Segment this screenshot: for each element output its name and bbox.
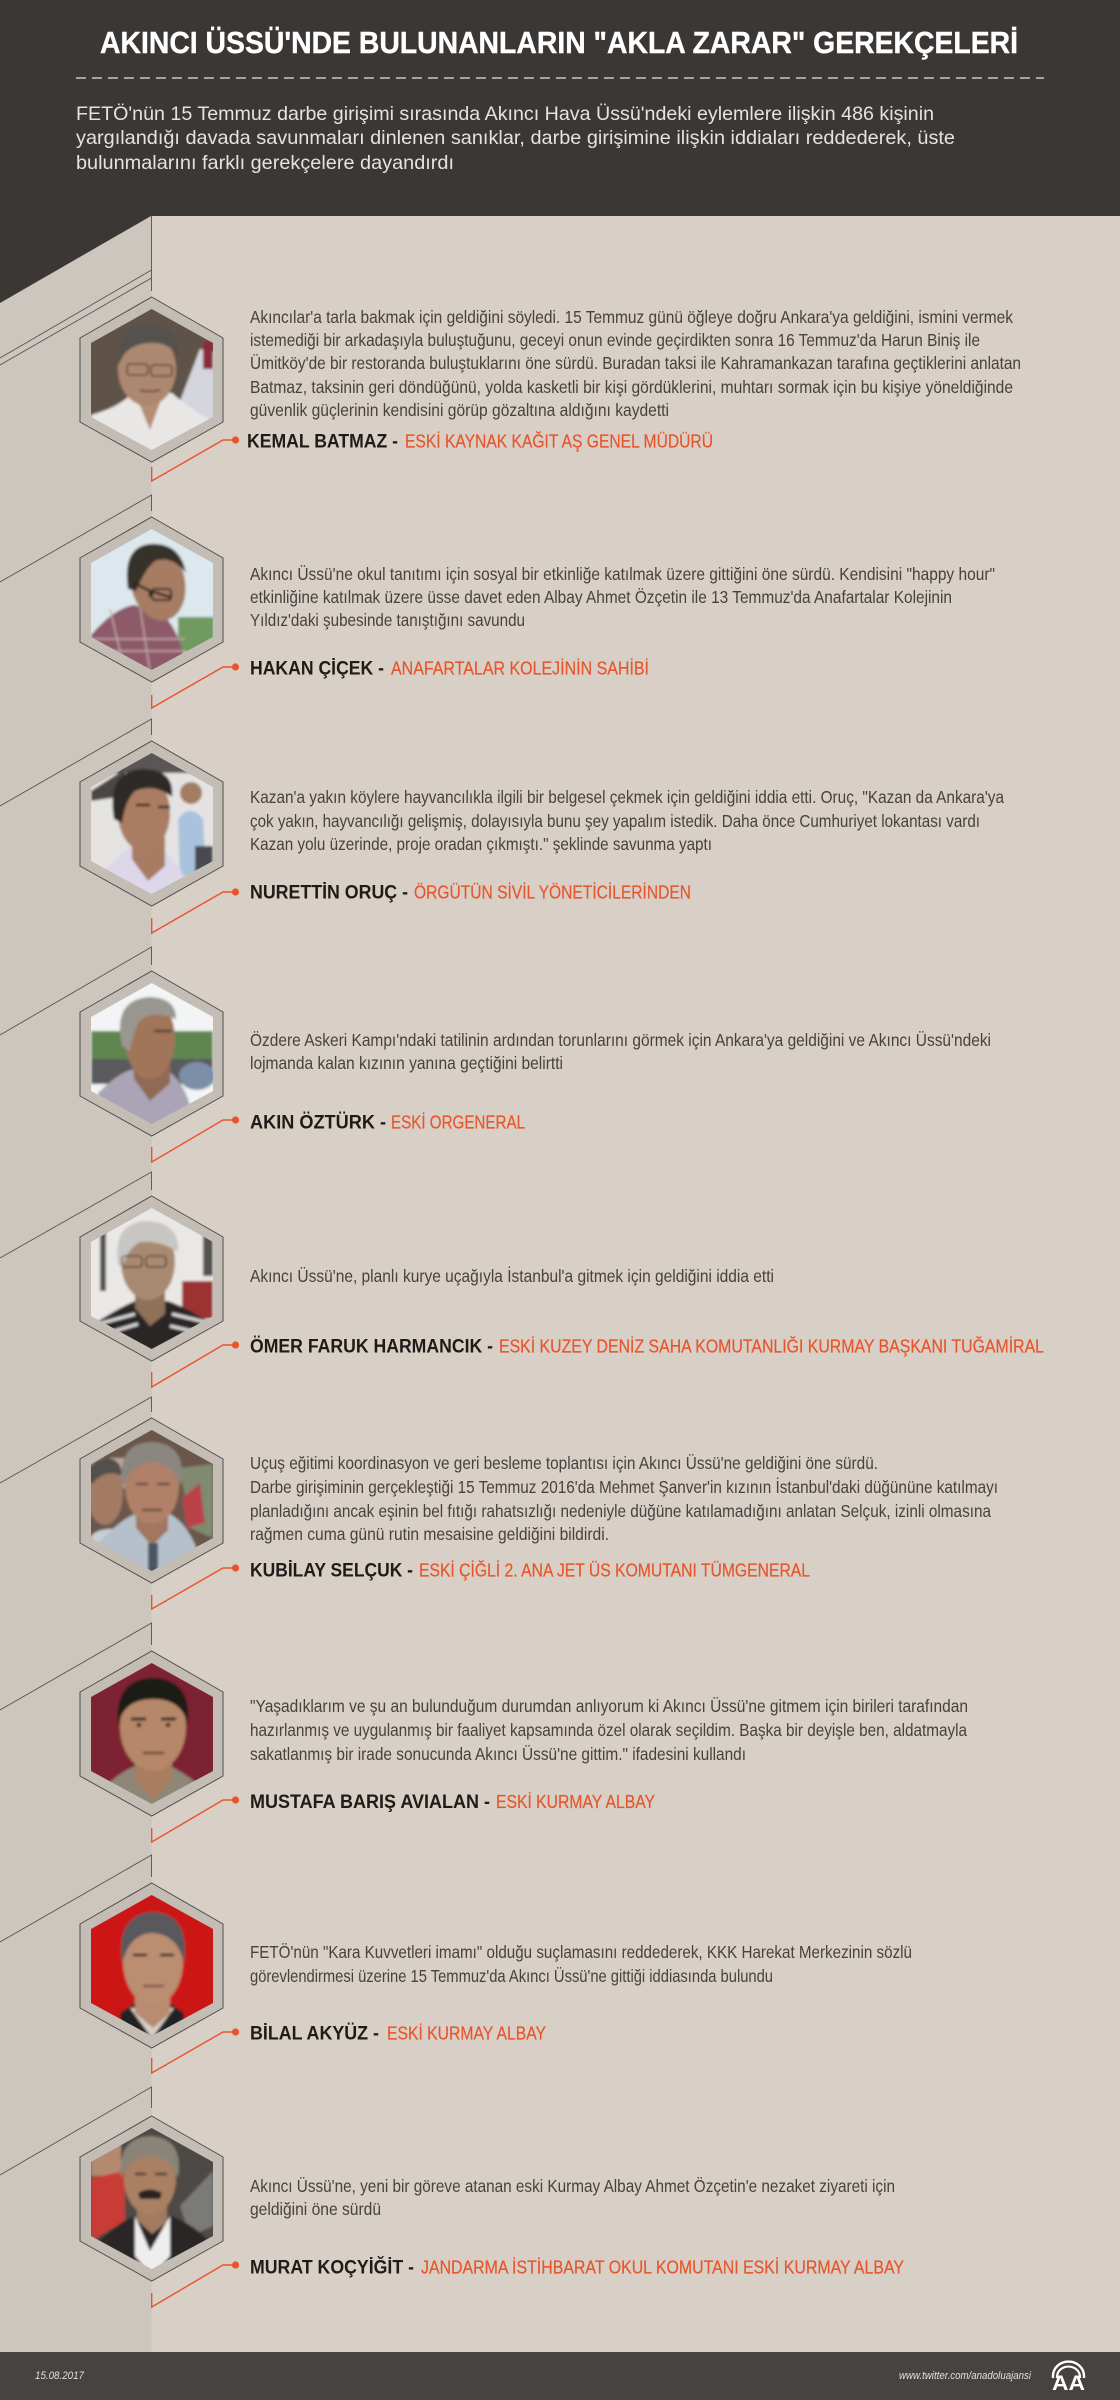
description <box>250 307 1021 420</box>
portrait: Kubilay Selçuk <box>80 1418 223 1583</box>
connector <box>152 1341 239 1387</box>
panel: Murat Koçyiğit <box>0 2087 904 2307</box>
description <box>250 1942 912 1986</box>
name and role: ESKİ ÇİĞLİ 2. ANA JET ÜS KOMUTANI TÜMGENERAL <box>419 1560 810 1580</box>
intro text: yargılandığı davada savunmaları dinlenen sanıklar, darbe girişimine ilişkin iddiaları reddederek, üste <box>76 127 955 149</box>
portrait: Ömer Faruk Harmancık <box>80 1196 223 1361</box>
description <box>250 1030 991 1073</box>
panel: Kubilay Selçuk <box>0 1397 998 1609</box>
description: Ümitköy'de bir restoranda buluştuklarını öne sürdü. Buradan taksi ile Kahramankazan tarafına geçtiklerini anlatan <box>250 353 1021 373</box>
description: Kazan'a yakın köylere hayvancılıkla ilgili bir belgesel çekmek için geldiğini iddia etti. Oruç, "Kazan da Ankara'ya <box>250 787 1004 807</box>
description: "Yaşadıklarım ve şu an bulunduğum durumdan anlıyorum ki Akıncı Üssü'ne gitmem için birileri tarafından <box>250 1696 968 1716</box>
name and role <box>247 430 713 452</box>
name and role <box>250 1791 655 1813</box>
description: güvenlik güçlerinin kendisini görüp gözaltına aldığını kaydetti <box>250 400 669 420</box>
name and role: ANAFARTALAR KOLEJİNİN SAHİBİ <box>391 658 649 678</box>
description: etkinliğine katılmak üzere üsse davet eden Albay Ahmet Özçetin ile 13 Temmuz'da Anafartalar Kolejinin <box>250 587 952 607</box>
panel: Bilal Akyüz <box>0 1855 912 2073</box>
name and role <box>250 882 691 904</box>
description: istemediği bir arkadaşıyla buluştuğunu, geceyi onun evinde geçirdikten sonra 16 Temmuz'da Harun Biniş ile <box>250 330 980 350</box>
portrait: Nurettin Oruç <box>80 741 223 906</box>
description: Akıncı Üssü'ne okul tanıtımı için sosyal bir etkinliğe katılmak üzere gittiğini öne sürdü. Kendisini "happy hour" <box>250 564 995 584</box>
footer <box>0 2352 1120 2400</box>
description: lojmanda kalan kızının yanına geçtiğini belirtti <box>250 1053 563 1073</box>
description: Darbe girişiminin gerçekleştiği 15 Temmuz 2016'da Mehmet Şanver'in kızının İstanbul'daki düğününe katılmayı <box>250 1477 998 1497</box>
portrait: Hakan Çiçek <box>80 517 223 682</box>
description: geldiğini öne sürdü <box>250 2199 381 2219</box>
portrait: Akın Öztürk <box>80 971 223 1136</box>
portrait: Murat Koçyiğit <box>80 2116 223 2281</box>
description: Kazan yolu üzerinde, proje oradan çıkmıştı." şeklinde savunma yaptı <box>250 834 712 854</box>
portrait: Bilal Akyüz <box>80 1883 223 2048</box>
connector <box>152 1116 239 1162</box>
name and role: ÖRGÜTÜN SİVİL YÖNETİCİLERİNDEN <box>414 882 691 902</box>
description <box>250 1696 968 1764</box>
panel: Kemal Batmaz <box>0 216 1021 481</box>
description: sakatlanmış bir irade sonucunda Akıncı Üssü'ne gittim." ifadesini kullandı <box>250 1744 746 1764</box>
description: Batmaz, taksinin geri döndüğünü, yolda kasketli bir kişi gördüklerini, muhtarı sormak için bu kişiye yöneldiğinde <box>250 377 1013 397</box>
description: rağmen cuma günü rutin mesaisine geldiğini bildirdi. <box>250 1524 609 1544</box>
description: Akıncılar'a tarla bakmak için geldiğini söyledi. 15 Temmuz günü öğleye doğru Ankara'ya geldiğini, ismini vermek <box>250 307 1013 327</box>
panel: Mustafa Barış Avıalan <box>0 1623 968 1842</box>
intro text: FETÖ'nün 15 Temmuz darbe girişimi sırasında Akıncı Hava Üssü'ndeki eylemlere ilişkin 486 kişinin <box>76 103 934 125</box>
connector <box>152 1796 239 1842</box>
name and role <box>250 2022 546 2044</box>
panel: Ömer Faruk Harmancık <box>0 1172 1044 1387</box>
portrait: Mustafa Barış Avıalan <box>80 1651 223 1816</box>
name and role: MURAT KOÇYİĞİT - <box>250 2256 414 2278</box>
name and role: KUBİLAY SELÇUK - <box>250 1560 413 1582</box>
left strip <box>0 216 152 2352</box>
name and role: JANDARMA İSTİHBARAT OKUL KOMUTANI ESKİ KURMAY ALBAY <box>421 2256 904 2278</box>
name and role: ESKİ KURMAY ALBAY <box>387 2022 546 2044</box>
source url: www.twitter.com/anadoluajansi <box>899 2370 1031 2382</box>
connector <box>152 663 239 708</box>
name and role <box>250 1336 1044 1358</box>
connector <box>152 2028 239 2073</box>
name and role <box>250 1560 810 1582</box>
description: görevlendirmesi üzerine 15 Temmuz'da Akıncı Üssü'ne gittiği iddiasında bulundu <box>250 1966 773 1986</box>
name and role: ESKİ KURMAY ALBAY <box>496 1791 655 1812</box>
intro text: bulunmalarını farklı gerekçelere dayandırdı <box>76 152 454 174</box>
connector <box>152 888 239 933</box>
name and role: KEMAL BATMAZ - <box>247 432 398 452</box>
portrait: Kemal Batmaz <box>80 297 223 462</box>
panel: Akın Öztürk <box>0 947 991 1162</box>
header panel <box>0 0 1120 303</box>
panel: Nurettin Oruç <box>0 719 1004 933</box>
description: Akıncı Üssü'ne, planlı kurye uçağıyla İstanbul'a gitmek için geldiğini iddia etti <box>250 1266 774 1286</box>
description <box>250 787 1004 854</box>
description: Özdere Askeri Kampı'ndaki tatilinin ardından torunlarını görmek için Ankara'ya geldiğini ve Akıncı Üssü'ndeki <box>250 1030 991 1050</box>
description: hazırlanmış ve uygulanmış bir faaliyet kapsamında özel olarak seçildim. Başka bir deyişle ben, aldatmayla <box>250 1720 967 1740</box>
description: planladığını ancak eşinin bel fıtığı rahatsızlığı nedeniyle düğüne katılamadığını anlatan Selçuk, izinli olmasına <box>250 1501 991 1521</box>
description <box>250 1453 998 1544</box>
intro text <box>76 103 955 174</box>
date: 15.08.2017 <box>35 2370 85 2382</box>
description <box>250 2176 895 2219</box>
name and role: ESKİ KUZEY DENİZ SAHA KOMUTANLIĞI KURMAY BAŞKANI TUĞAMİRAL <box>499 1336 1044 1356</box>
description: Yıldız'daki şubesinde tanıştığını savundu <box>250 610 525 630</box>
title: AKINCI ÜSSÜ'NDE BULUNANLARIN "AKLA ZARAR" GEREKÇELERİ <box>100 25 1018 60</box>
description: Uçuş eğitimi koordinasyon ve geri besleme toplantısı için Akıncı Üssü'ne geldiğini öne sürdü. <box>250 1453 878 1473</box>
description: Akıncı Üssü'ne, yeni bir göreve atanan eski Kurmay Albay Ahmet Özçetin'e nezaket ziyareti için <box>250 2176 895 2196</box>
icon: AA logo: AA <box>1052 2372 1085 2395</box>
description: FETÖ'nün "Kara Kuvvetleri imamı" olduğu suçlamasını reddederek, KKK Harekat Merkezinin sözlü <box>250 1942 912 1962</box>
connector <box>152 2261 239 2307</box>
name and role <box>250 658 649 680</box>
description <box>250 564 995 630</box>
name and role: HAKAN ÇİÇEK - <box>250 658 384 680</box>
icon: AA logo <box>1052 2362 1085 2395</box>
connector <box>152 436 239 481</box>
description: çok yakın, hayvancılığı gelişmiş, dolayısıyla bunu şey yapalım istedik. Daha önce Cumhuriyet lokantası vardı <box>250 811 980 831</box>
panel: Hakan Çiçek <box>0 495 995 708</box>
name and role: NURETTİN ORUÇ - <box>250 882 408 904</box>
name and role: MUSTAFA BARIŞ AVIALAN - <box>250 1792 490 1813</box>
name and role: ÖMER FARUK HARMANCIK - <box>250 1336 493 1358</box>
name and role: ESKİ KAYNAK KAĞIT AŞ GENEL MÜDÜRÜ <box>405 430 713 452</box>
connector <box>152 1564 239 1609</box>
name and role: AKIN ÖZTÜRK - <box>250 1112 386 1134</box>
name and role: BİLAL AKYÜZ - <box>250 2024 379 2044</box>
name and role <box>250 1112 525 1134</box>
name and role: ESKİ ORGENERAL <box>391 1112 525 1132</box>
name and role <box>250 2256 904 2278</box>
